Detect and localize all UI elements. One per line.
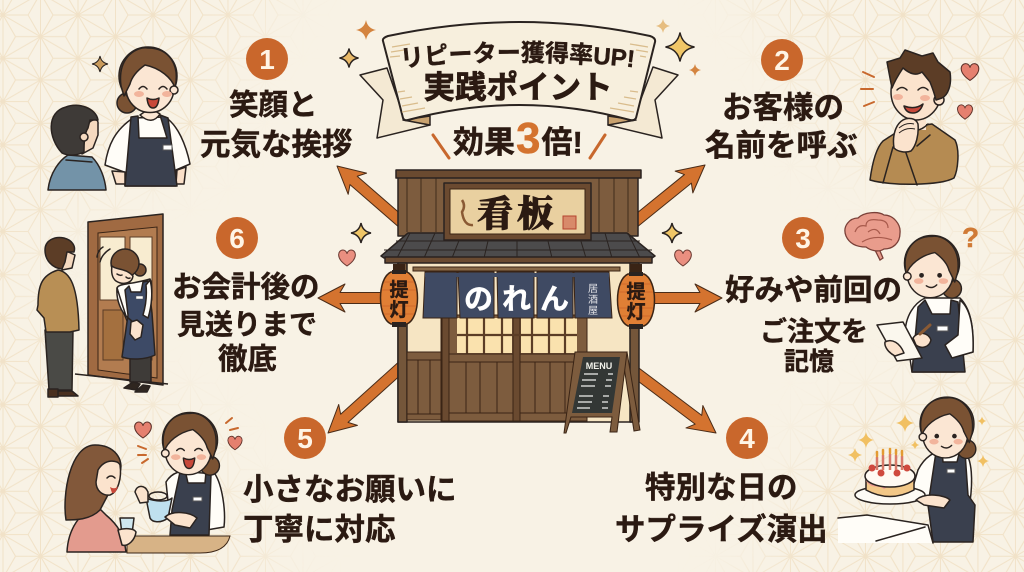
title banner bbox=[359, 21, 679, 139]
tile lines bbox=[384, 233, 652, 258]
roof tiles bbox=[381, 233, 655, 258]
door lower rails bbox=[449, 354, 587, 413]
menu board bbox=[564, 352, 640, 433]
sign ornament bbox=[462, 200, 473, 225]
staff hands bbox=[135, 486, 197, 528]
right ribbon tail bbox=[608, 67, 678, 138]
question mark: ? bbox=[962, 222, 979, 253]
shop wall bbox=[398, 262, 638, 422]
arrow 3 bbox=[637, 284, 722, 312]
door frame bbox=[441, 315, 587, 421]
noren small text: 居 bbox=[588, 283, 598, 295]
menu back leg bbox=[622, 352, 640, 431]
point 2 text: お客様の bbox=[722, 91, 844, 125]
man bbox=[37, 238, 79, 397]
sparkle bbox=[92, 56, 108, 72]
customer bbox=[48, 105, 106, 190]
apron bbox=[170, 470, 211, 535]
point 6 text: 見送りまで bbox=[177, 309, 317, 340]
number badge 6: 6 bbox=[229, 223, 245, 254]
noren small text: 酒 bbox=[588, 294, 598, 306]
signboard text: 看板 bbox=[477, 186, 557, 237]
point 3 text: 記憶 bbox=[784, 348, 834, 376]
jacket bbox=[37, 270, 79, 332]
staff bowing bbox=[97, 247, 155, 392]
point 4 text: 特別な日の bbox=[645, 471, 798, 505]
arrow 1 bbox=[328, 155, 414, 236]
noren small text: 屋 bbox=[588, 305, 598, 317]
point 1 text: 元気な挨拶 bbox=[200, 128, 352, 162]
posts bbox=[398, 263, 407, 422]
staff head bbox=[162, 412, 219, 475]
hearts bbox=[961, 64, 979, 80]
staff body bbox=[166, 471, 225, 532]
shop illustration bbox=[380, 170, 655, 433]
illustration 4: staff with cake bbox=[838, 397, 989, 543]
plate bbox=[855, 486, 925, 504]
arrow 6 bbox=[318, 284, 403, 312]
ribbon folds bbox=[403, 116, 636, 125]
hearts bbox=[135, 422, 151, 438]
glass bbox=[146, 498, 172, 522]
title line 1: リピーター獲得率UP! bbox=[404, 40, 634, 68]
arrow 2 bbox=[622, 154, 714, 236]
roof beam bbox=[385, 257, 652, 263]
floor line bbox=[75, 374, 168, 384]
left ribbon tail bbox=[360, 68, 430, 138]
table bbox=[838, 515, 933, 543]
noren curtain bbox=[413, 267, 620, 318]
sleeves bbox=[117, 280, 152, 322]
customer face bbox=[96, 461, 121, 495]
counter bbox=[127, 536, 230, 553]
notepad bbox=[877, 322, 922, 361]
point 1 text: 笑顔と bbox=[229, 89, 318, 122]
lantern text: 提 bbox=[626, 281, 646, 303]
neck and face bbox=[62, 250, 75, 270]
noren curtain: れ bbox=[502, 284, 531, 316]
shoes bbox=[48, 389, 78, 397]
window glass left bbox=[457, 318, 512, 353]
apron bbox=[912, 300, 965, 372]
body bbox=[912, 450, 972, 502]
point 4 text: サプライズ演出 bbox=[615, 512, 828, 547]
wood planks bbox=[407, 178, 628, 232]
signboard bbox=[444, 183, 591, 240]
illustration 2: man bbox=[861, 50, 979, 185]
noren rod bbox=[413, 267, 620, 271]
door and lower structure bbox=[398, 263, 639, 422]
point 3 text: ご注文を bbox=[760, 316, 868, 347]
hair bbox=[45, 238, 75, 269]
main ribbon bbox=[383, 22, 655, 120]
point 6 text: お会計後の bbox=[172, 271, 320, 304]
subtitle text: 効果3倍! bbox=[453, 114, 583, 163]
arrow 4 bbox=[621, 357, 724, 444]
customer hair back bbox=[65, 445, 121, 520]
apron bbox=[122, 281, 155, 359]
head bbox=[904, 235, 961, 298]
right sleeve bbox=[945, 300, 973, 358]
number badge 1 bbox=[246, 38, 288, 80]
lantern text: 灯 bbox=[389, 299, 409, 321]
number badge 4 bbox=[726, 417, 768, 459]
illustration 5: staff serving water bbox=[65, 412, 242, 553]
window lattice bbox=[457, 318, 577, 354]
brain bbox=[845, 213, 900, 260]
sweater bbox=[870, 124, 958, 184]
hand bbox=[916, 495, 950, 508]
right lantern bbox=[618, 264, 654, 329]
hands and pen bbox=[885, 333, 931, 356]
subtitle 効果3倍 bbox=[433, 114, 605, 163]
clasped hands bbox=[893, 118, 918, 152]
illustration 1: greeting bbox=[48, 47, 190, 190]
menu lines bbox=[577, 374, 613, 408]
apron bbox=[928, 450, 975, 542]
ribbon hatching bbox=[390, 44, 648, 112]
staff woman bbox=[105, 47, 190, 186]
white blouse bbox=[117, 279, 152, 335]
upper wood wall bbox=[398, 176, 638, 236]
cake bbox=[865, 449, 915, 496]
customer body bbox=[67, 507, 126, 552]
arrow 5 bbox=[319, 356, 412, 443]
point 6 text: 徹底 bbox=[218, 343, 277, 376]
pants bbox=[45, 330, 73, 390]
decorative slash left bbox=[433, 135, 449, 158]
menu frame bbox=[564, 352, 627, 433]
number badge 2: 2 bbox=[774, 45, 790, 76]
illustration 3: staff with notepad bbox=[845, 213, 979, 372]
sparkles bbox=[896, 414, 914, 432]
window glass right bbox=[521, 318, 577, 353]
number badge 5: 5 bbox=[297, 423, 313, 454]
point 5 text: 小さなお願いに bbox=[243, 473, 456, 507]
number badge 3 bbox=[782, 217, 824, 259]
arms bbox=[883, 135, 930, 185]
number badge 6 bbox=[216, 217, 258, 259]
sign stamp bbox=[563, 216, 576, 229]
menu text: MENU bbox=[586, 361, 612, 371]
number badge 2 bbox=[761, 39, 803, 81]
menu blackboard bbox=[572, 357, 620, 413]
noren text: の bbox=[464, 284, 493, 316]
point 2 text: 名前を呼ぶ bbox=[705, 129, 858, 163]
bowed head bbox=[134, 264, 146, 276]
noren panels bbox=[423, 272, 457, 318]
emphasis lines bbox=[138, 418, 238, 463]
title line 2: 実践ポイント bbox=[423, 69, 613, 105]
sparkles and hearts beside shop bbox=[339, 223, 691, 266]
number badge 1: 1 bbox=[259, 44, 275, 75]
top beam bbox=[396, 170, 641, 178]
illustration 6: seeing off bbox=[37, 214, 168, 397]
point 5 text: 丁寧に対応 bbox=[243, 513, 396, 547]
head bbox=[919, 397, 976, 458]
point 3 text: 好みや前回の bbox=[725, 274, 902, 307]
door bbox=[88, 214, 163, 385]
number badge 3: 3 bbox=[795, 223, 811, 254]
number badge 5 bbox=[284, 417, 326, 459]
customer glass and hand bbox=[120, 518, 134, 534]
left wood panel bbox=[407, 352, 442, 420]
left lantern bbox=[380, 264, 418, 327]
lantern text: 灯 bbox=[626, 301, 646, 323]
emphasis lines bbox=[861, 72, 874, 106]
decorative slash right bbox=[590, 135, 605, 158]
legs bbox=[130, 355, 151, 382]
body bbox=[905, 298, 973, 372]
sparkles around title bbox=[340, 19, 701, 76]
man head bbox=[887, 50, 951, 130]
lantern text: 提 bbox=[389, 279, 409, 301]
number badge 4: 4 bbox=[739, 423, 755, 454]
hands bbox=[130, 320, 143, 340]
noren curtain: ん bbox=[540, 284, 569, 316]
bow motion lines bbox=[97, 247, 110, 262]
